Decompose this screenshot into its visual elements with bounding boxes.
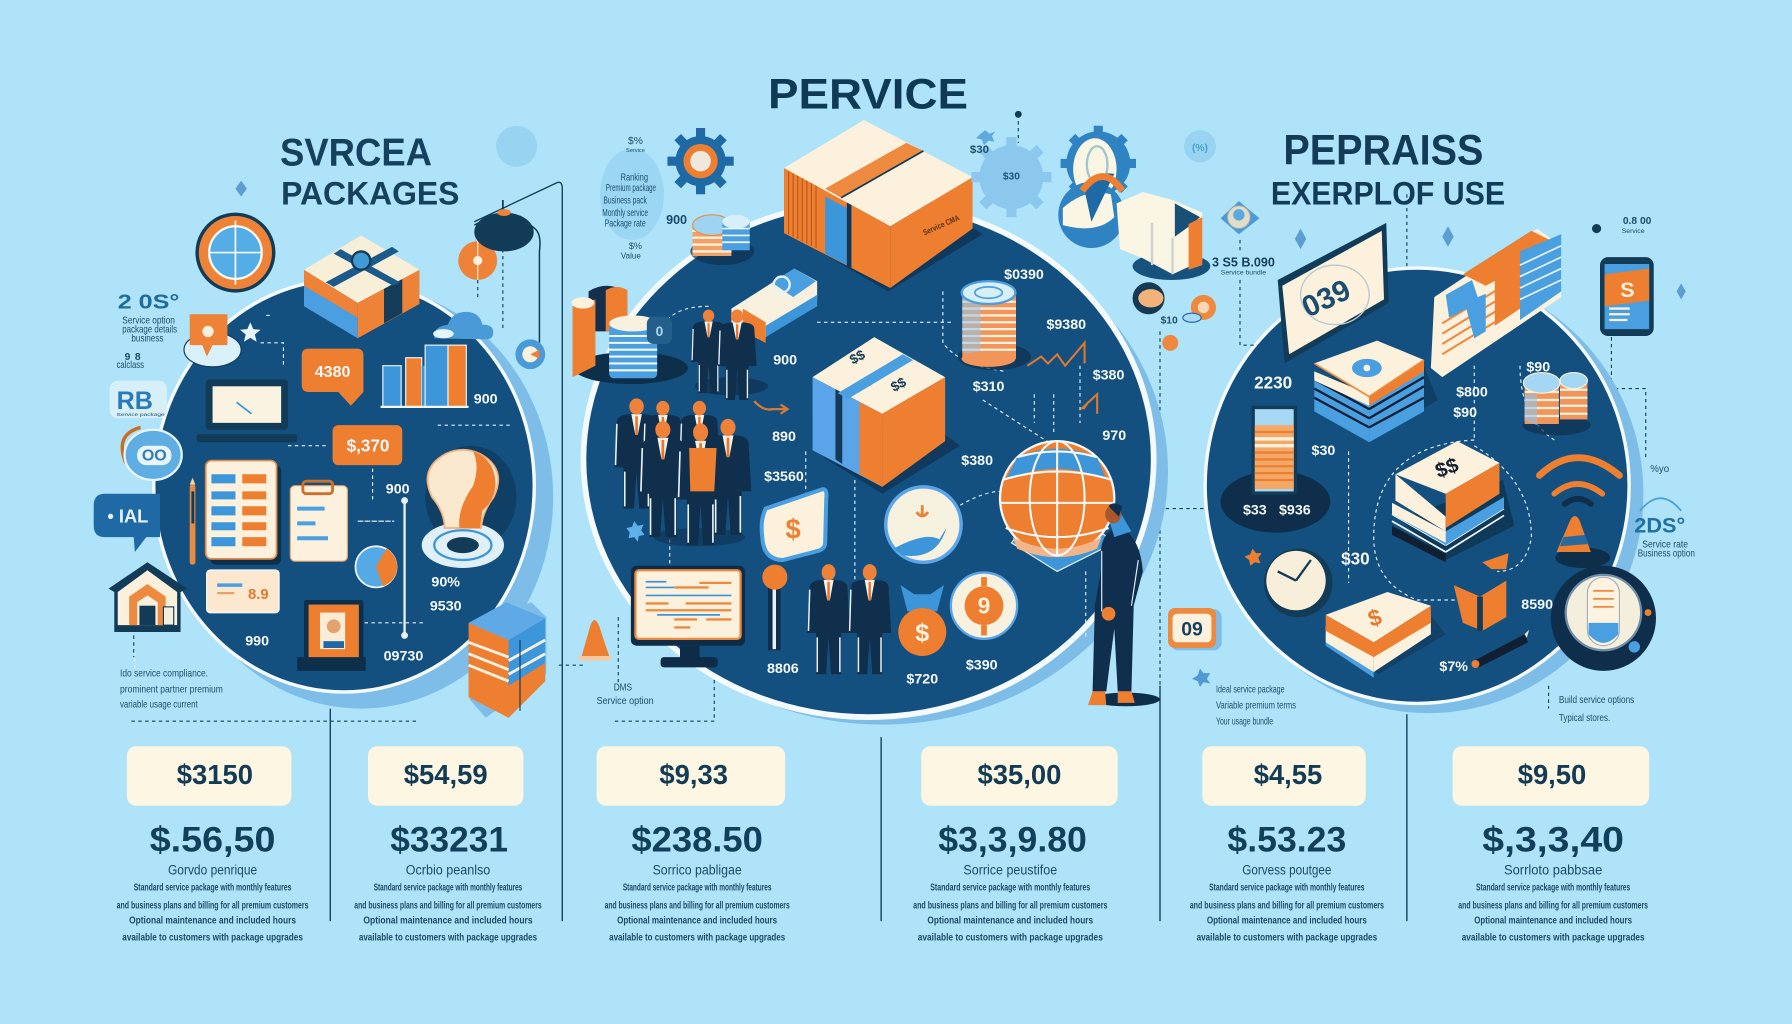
price column 5: available to customers with package upgrades [1197, 933, 1377, 944]
pie chart [355, 546, 397, 587]
stat: 2DS right: 2DS° [1634, 513, 1685, 538]
stat: 2DS right: Service rate [1642, 539, 1688, 550]
panel: left circle [135, 278, 553, 709]
price column 4: $3,3,9.80 [938, 819, 1087, 859]
price column 2 [354, 746, 542, 944]
text: centre-left note cloud: Service [626, 148, 645, 154]
text: centre-left note cloud: Ranking [621, 173, 648, 184]
icon: small gears right: $10 [1161, 315, 1178, 326]
price column 5 [1190, 746, 1384, 944]
icon: phone: S [1620, 277, 1635, 302]
icon: compass [195, 213, 275, 293]
title: right column [1271, 127, 1505, 212]
icon: top right gears [971, 126, 1136, 248]
icon: swirl speech bubble: OO [142, 448, 167, 465]
icon: blue speech bubble [94, 494, 160, 552]
price column 4: Standard service package with monthly features [930, 882, 1090, 893]
icon: clipboard [290, 481, 347, 561]
callout: orange price tag [333, 425, 402, 465]
icon: cylinder gauge: $33 [1243, 502, 1267, 518]
price column 1: and business plans and billing for all premium customers [117, 901, 309, 912]
icon: money bag: $ [915, 619, 929, 647]
icon: dollar bubble [762, 489, 827, 560]
icon: phone [1600, 257, 1654, 336]
labels: centre circle values: 890 [772, 429, 796, 445]
text: right footnotes [1216, 685, 1634, 728]
icon: coin: 9 [978, 593, 990, 619]
price column 3: $9,33 [659, 759, 728, 790]
text: centre-left note cloud: $% [629, 241, 642, 251]
badge: RB: RB [117, 387, 153, 415]
price column 6: available to customers with package upgrades [1462, 933, 1645, 944]
labels: centre circle values: 900 [773, 353, 797, 369]
labels: left circle values: 9530 [430, 598, 462, 614]
icon: centre box: $$ [847, 347, 868, 367]
icon: small gears right [1133, 282, 1216, 351]
icon: cylinder gauge [1221, 406, 1330, 533]
price column 2: and business plans and billing for all premium customers [354, 901, 542, 912]
icon: coin stack right [958, 281, 1031, 370]
price column 3: Standard service package with monthly features [623, 882, 772, 893]
labels: centre circle values: 8806 [767, 661, 799, 677]
labels: left circle values: 990 [245, 634, 269, 650]
icon: sphere [886, 487, 961, 562]
people: team group [614, 398, 751, 546]
price column 2: $54,59 [404, 759, 488, 790]
text: cone footnote: DMS [614, 682, 632, 693]
price column 2: $33231 [390, 819, 508, 859]
callout: orange speech [302, 349, 363, 406]
stat: 2DS right: %yo [1650, 464, 1669, 475]
labels: centre circle values: 970 [1102, 428, 1126, 444]
price column 4: Optional maintenance and included hours [927, 915, 1093, 926]
text: centre-left note cloud: Value [621, 251, 641, 260]
labels: centre circle values: $3560 [764, 469, 804, 485]
title: left column: SVRCEA [280, 132, 432, 175]
stat: 2 OS left: package details [122, 325, 177, 336]
text: left note: variable usage current [120, 699, 198, 710]
icon: cloud [433, 312, 493, 339]
price column 5: Standard service package with monthly features [1209, 882, 1365, 893]
price column 3: Optional maintenance and included hours [617, 915, 777, 926]
icon: centre box [813, 337, 960, 494]
icon: top-right badge: Service bundle [1221, 269, 1266, 276]
labels: right circle values: $800 [1456, 385, 1488, 401]
stat: 2 OS left: 2 0S° [118, 291, 179, 314]
labels: right circle values: $90 [1526, 359, 1550, 375]
icon: bottom book: $ [1365, 603, 1385, 632]
text: left note: Ido service compliance. [120, 669, 208, 680]
icon: left tower and stack [571, 286, 688, 384]
title: right column: PEPRAISS [1283, 127, 1483, 174]
price column 4: Sorrice peustifoe [963, 862, 1057, 877]
text: left note [120, 669, 223, 710]
icon: flower [515, 339, 545, 369]
icon: open book [1454, 553, 1509, 631]
price column 1: Optional maintenance and included hours [129, 915, 296, 926]
price column 3 [597, 746, 790, 944]
icon: cash bundle [731, 269, 817, 343]
price column 5: $4,55 [1254, 759, 1322, 790]
icon: coin stack top [690, 215, 754, 265]
price column 4 [913, 746, 1118, 944]
icon: orange arrow [754, 401, 787, 414]
icon: small blue star [626, 521, 645, 542]
labels: left circle values: 09730 [384, 649, 423, 665]
icon: pencil [190, 478, 195, 565]
stat: 2 OS left: 98 [125, 352, 141, 363]
text: centre-left note cloud: $% [628, 136, 643, 147]
title: left column [280, 132, 459, 212]
price column 6 [1453, 746, 1649, 944]
text: cone footnote: Service option [597, 696, 654, 707]
text: right footnotes: Your usage bundle [1216, 717, 1273, 728]
price column 2: available to customers with package upgrades [359, 933, 537, 944]
labels: top-right tags: (%) [1192, 143, 1208, 154]
labels: right circle values: $30 [1341, 549, 1370, 569]
price column 1: Standard service package with monthly features [134, 882, 292, 893]
icon: monitor right: 039 [1297, 273, 1356, 324]
labels: top-right tags: $30 [970, 144, 989, 156]
icon: number badge: 09 [1181, 618, 1203, 640]
price column 4: $35,00 [978, 759, 1061, 790]
title: left column: PACKAGES [281, 176, 459, 212]
bar chart [381, 345, 469, 407]
badge: RB: Service package [117, 412, 165, 417]
price column 6: $9,50 [1518, 759, 1586, 790]
text: right footnotes: Build service options [1559, 695, 1634, 706]
icon: wifi signal [1539, 458, 1619, 504]
labels: right circle values [1254, 359, 1553, 675]
labels: right circle values: $7% [1439, 659, 1468, 675]
labels: top far-right: 0.8 00 [1623, 216, 1652, 227]
price column 6: Sorrloto pabbsae [1504, 862, 1603, 877]
labels: centre circle values: $310 [973, 379, 1004, 395]
labels: right circle values: $90 [1453, 405, 1477, 421]
price column 6: $,3,3,40 [1482, 819, 1624, 859]
price column 5: and business plans and billing for all premium customers [1190, 901, 1384, 912]
icon: top right gears: $30 [1003, 171, 1020, 182]
trend lines [1027, 343, 1097, 414]
text: centre-left note cloud: Premium package [606, 183, 656, 194]
icon: number badge [1168, 608, 1222, 687]
price column 1: available to customers with package upgrades [122, 933, 303, 944]
labels: left circle values: 900 [474, 391, 498, 407]
stat: 2 OS left: calclass [117, 360, 144, 371]
text: centre-left note cloud: Package rate [605, 218, 646, 229]
labels: centre circle values: $720 [906, 671, 938, 687]
title: centre column: PERVICE [768, 71, 968, 118]
icon: centre box: $$ [888, 374, 909, 395]
icon: location chat [184, 314, 241, 367]
price column 2: Standard service package with monthly features [374, 882, 522, 893]
panel: centre circle [581, 199, 1168, 725]
icon: big package box: Service CMA [922, 213, 961, 237]
icon: central book stack: $$ [1432, 453, 1462, 483]
stat: 2 OS left: Service option [122, 315, 175, 326]
icon: left package box [304, 235, 419, 338]
people: two suits top [691, 310, 768, 400]
stat: 2 OS left: business [131, 334, 164, 345]
icon: ticket: 8.9 [248, 587, 269, 603]
labels: right circle values: $30 [1312, 443, 1335, 459]
price column 4: and business plans and billing for all premium customers [913, 901, 1108, 912]
price column 6: Standard service package with monthly features [1476, 882, 1630, 893]
icon: blue speech bubble: • IAL [107, 505, 148, 526]
icon: cone right [1555, 516, 1610, 568]
price column 6: and business plans and billing for all premium customers [1458, 901, 1648, 912]
stat: 2 OS left [117, 291, 179, 371]
icon: lollipop marker [762, 565, 787, 650]
labels: centre circle values: $390 [966, 658, 998, 674]
labels: centre circle values: $9380 [1046, 317, 1086, 333]
icon: pendant lamp [458, 200, 540, 343]
price column 3: available to customers with package upgrades [609, 933, 785, 944]
icon: lens device [1551, 566, 1656, 671]
icon: light bulb [422, 446, 517, 568]
price column 3: $238.50 [631, 819, 763, 859]
person: standing figure [1088, 503, 1160, 706]
icon: central book stack [1392, 441, 1514, 562]
price column 5: Gorvess poutgee [1242, 862, 1332, 877]
icon: swirl speech bubble [122, 427, 182, 480]
text: centre-left note cloud: Business pack [603, 195, 647, 206]
labels: centre circle values: $380 [961, 453, 993, 469]
labels: top far-right: Service [1622, 228, 1645, 235]
icon: house [109, 562, 187, 657]
labels: top far-right [1592, 216, 1652, 235]
stat: 2DS right: Business option [1638, 549, 1695, 560]
price column 1 [117, 746, 309, 944]
price column 5: $.53.23 [1227, 819, 1346, 859]
panel: right circle [1203, 266, 1643, 713]
labels: left circle values: 900 [386, 482, 410, 498]
labels: centre circle values: $0390 [1004, 267, 1044, 283]
callout: orange speech: 4380 [315, 364, 350, 381]
icon: ticket [207, 570, 279, 613]
icon: top-right badge: 3 S5 B.090 [1212, 255, 1275, 269]
labels: left circle values [245, 391, 498, 665]
text: centre-left note cloud [600, 136, 687, 260]
icon: paper stack right [1431, 229, 1561, 377]
price column 3: Sorrico pabligae [653, 862, 742, 877]
icon: monitor [631, 566, 745, 667]
icon: cream block box [1117, 192, 1210, 280]
price column 2: Ocrbio peanlso [406, 862, 491, 877]
labels: centre circle values: $380 [1093, 367, 1124, 383]
icon: dollar bubble: $ [786, 513, 801, 544]
text: right footnotes: Typical stores. [1559, 713, 1610, 724]
icon: bottom book [1326, 592, 1446, 678]
price column 2: Optional maintenance and included hours [363, 915, 533, 926]
icon: star [240, 322, 261, 342]
callout: orange price tag: $,370 [347, 435, 389, 455]
labels: right circle values: 8590 [1521, 597, 1553, 613]
text: right footnotes: Ideal service package [1216, 685, 1285, 696]
price column 1: $.56,50 [150, 819, 275, 859]
icon: gear [667, 128, 734, 194]
table card [206, 461, 281, 565]
icon: pencil right [1471, 630, 1529, 668]
stat: 2DS right [1634, 464, 1695, 560]
labels: left circle values: 90% [431, 574, 460, 590]
labels: right circle values: 2230 [1254, 373, 1292, 393]
text: centre-left note cloud: 900 [666, 213, 687, 227]
labels: top-right tags [496, 111, 1216, 167]
column dividers [131, 182, 1646, 921]
price column 1: $3150 [177, 759, 253, 790]
icon: money bag [898, 585, 946, 656]
icon: coin [951, 573, 1017, 639]
badge: RB [110, 381, 167, 418]
icon: diamonds [235, 181, 1686, 299]
title: right column: EXERPLOF USE [1271, 176, 1505, 212]
icon: left tower and stack: 0 [656, 324, 664, 339]
icon: cone left [559, 617, 618, 686]
icon: photo frame [297, 600, 366, 671]
text: left note: prominent partner premium [120, 685, 223, 696]
price column 3: and business plans and billing for all premium customers [605, 901, 790, 912]
icon: server stack [469, 602, 546, 718]
icon: coin stacks right [1522, 373, 1591, 435]
icon: monitor right [1278, 223, 1389, 363]
text: cone footnote [597, 680, 714, 721]
text: centre-left note cloud: Monthly service [602, 208, 648, 219]
price column 5: Optional maintenance and included hours [1207, 915, 1367, 926]
icon: top-right badge [1212, 201, 1275, 345]
people: two suits bottom [807, 564, 891, 674]
icon: big package box [784, 120, 983, 291]
icon: cylinder gauge: $936 [1279, 502, 1311, 518]
scale line [360, 469, 408, 639]
text: right footnotes: Variable premium terms [1216, 701, 1296, 712]
icon: laptop [197, 379, 297, 442]
icon: globe [1000, 441, 1114, 571]
labels: centre circle values [764, 267, 1126, 687]
price column 6: Optional maintenance and included hours [1474, 915, 1632, 926]
price column 4: available to customers with package upgrades [918, 933, 1103, 944]
icon: clock [1245, 549, 1333, 617]
icon: book stack top [1314, 341, 1438, 442]
price column 1: Gorvdo penrique [168, 862, 257, 877]
